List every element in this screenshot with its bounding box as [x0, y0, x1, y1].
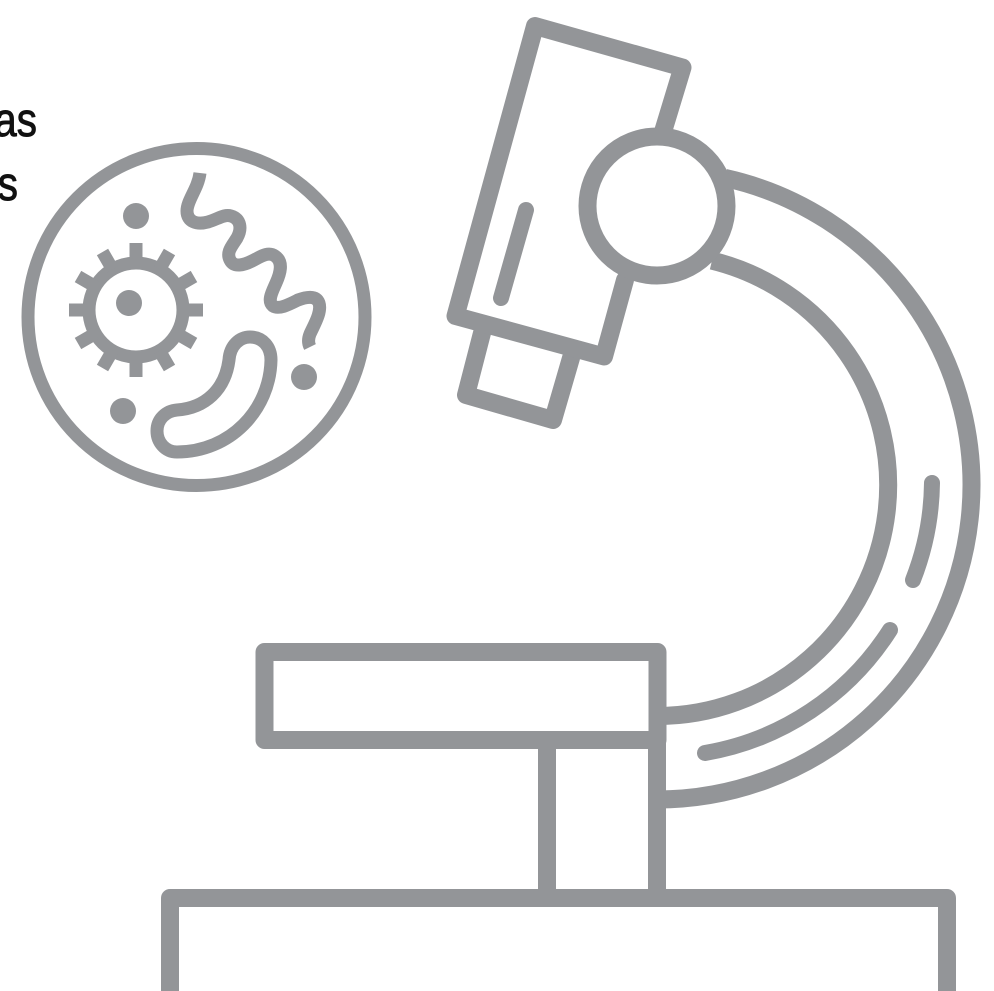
icon: microscope [170, 26, 971, 991]
microscope body tube [456, 26, 682, 356]
squiggle bacterium [187, 173, 320, 347]
spore dots [110, 203, 317, 424]
stage [264, 652, 658, 740]
highlight on tube [501, 210, 526, 298]
curved arm [657, 178, 971, 800]
icon: petri dish with microbes [28, 148, 365, 486]
dish outline [28, 148, 365, 486]
stand pillar [547, 736, 657, 898]
arm highlights [705, 483, 932, 753]
objective tube [466, 333, 571, 420]
virus cell with spikes [69, 243, 203, 377]
text fragment: cropped paragraph line endings [0, 94, 37, 211]
base [170, 898, 947, 991]
focus knob [588, 136, 726, 276]
rod bacterium [157, 337, 271, 452]
